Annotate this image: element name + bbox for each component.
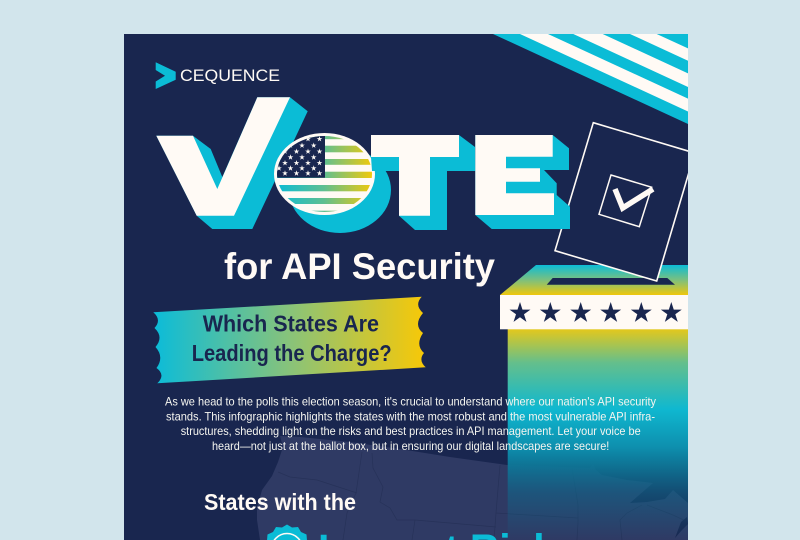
logo mark: [156, 62, 176, 89]
ribbon shape: [153, 297, 426, 383]
logo: [156, 62, 280, 89]
intro paragraph: heard—not just at the ballot box, but in ensuring our digital landscapes are secure!: [212, 439, 609, 453]
box lid: [500, 265, 688, 295]
letter E: [475, 135, 570, 229]
ballot paper: [555, 123, 695, 281]
intro paragraph: structures, shedding light on the risks and best practices in API management. Let your voice be: [181, 424, 641, 438]
corner stripes: [493, 34, 688, 124]
section heading: [204, 493, 542, 540]
subtitle: for API Security: [224, 245, 495, 287]
ribbon banner: [153, 297, 426, 383]
star band: [500, 295, 688, 329]
ribbon heading line 2: Leading the Charge?: [192, 340, 392, 366]
letter T: [371, 135, 475, 230]
map of the United States: [257, 436, 688, 540]
intro paragraph: stands. This infographic highlights the states with the most robust and the most vulnerable API infra-: [166, 409, 655, 423]
checkbox icon: [599, 175, 653, 227]
flag circle: [274, 133, 375, 215]
heading line 1: States with the: [204, 489, 356, 515]
badge icon: [267, 524, 307, 540]
letter V: [156, 97, 308, 229]
intro paragraph: [165, 395, 656, 453]
box slot: [547, 278, 675, 285]
ballot box: [500, 265, 689, 540]
infographic canvas: [124, 34, 688, 540]
intro paragraph: As we head to the polls this election season, it's crucial to understand where our nation's API security: [165, 395, 656, 409]
logo wordmark: CEQUENCE: [180, 66, 280, 85]
letter O: [270, 130, 391, 233]
VOTE title: [156, 97, 570, 233]
ribbon heading line 1: Which States Are: [203, 311, 379, 337]
box body: [508, 329, 689, 540]
main navy panel: [124, 34, 700, 540]
